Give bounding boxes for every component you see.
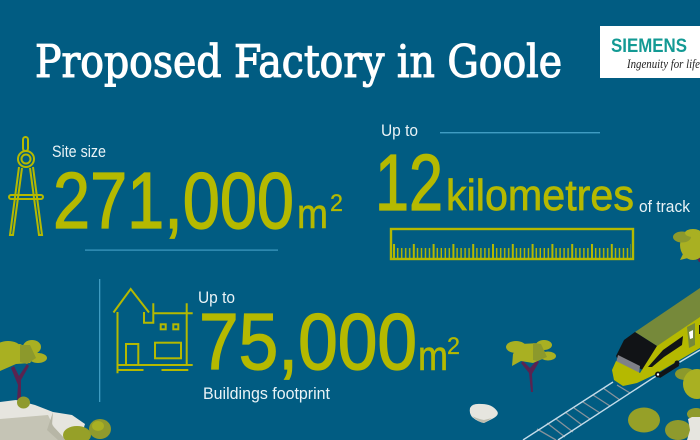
icon: ruler [391,229,633,259]
track label: up to: Up to [381,121,418,140]
bushes: left [17,396,111,440]
buildings value: 2 [447,333,460,360]
divider: track [440,132,600,133]
railway track [523,350,700,440]
rock: left [0,400,85,440]
tree: left [0,340,47,400]
site size label: Site size [52,142,106,161]
track value: 12 [375,138,443,227]
tree: top right [673,229,700,262]
site size value: 2 [330,190,343,217]
icon: building plan [114,289,193,373]
bushes: bottom right [628,408,700,440]
icon: compass [9,137,43,235]
divider: buildings [99,279,100,402]
title: Proposed Factory in Goole [35,35,562,88]
Siemens logo: SIEMENS [611,36,687,57]
tree: centre [506,340,556,392]
site size value: 271,000 [53,156,294,245]
track value [375,138,634,227]
track value: kilometres [446,171,634,220]
divider: site size [85,250,278,251]
train [612,288,700,386]
rock: centre [470,404,498,423]
buildings value: m [418,332,448,379]
rock: bottom right [687,417,700,440]
tree: right [675,368,700,399]
Siemens logo [600,26,700,78]
track suffix: of track [639,197,690,216]
site size value: m [297,190,328,237]
buildings label: footprint: Buildings footprint [203,384,330,403]
buildings value: 75,000 [199,297,417,386]
buildings label: up to: Up to [198,288,235,307]
